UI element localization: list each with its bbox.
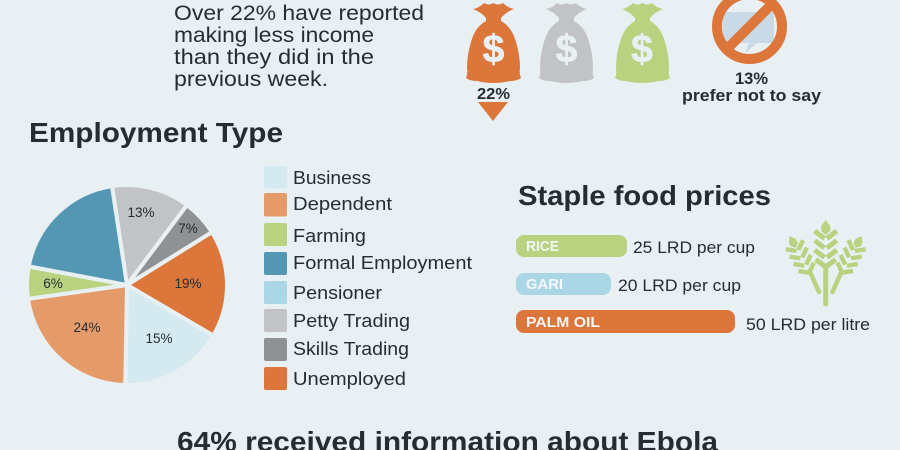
- bar: rice: RICE: [526, 239, 559, 255]
- bar: palm oil: 50 LRD per litre: [746, 315, 870, 334]
- icon: wheat: [781, 220, 870, 304]
- legend: employment type: Petty Trading: [293, 310, 410, 331]
- heading: staple food prices: Staple food prices: [518, 180, 771, 211]
- bar: palm oil: PALM OIL: [526, 315, 600, 331]
- bar: gari: GARI: [526, 277, 563, 293]
- pie chart: employment type: 7%: [178, 221, 198, 236]
- icon: down arrow: [478, 102, 508, 121]
- icon: no speech bubble: [717, 0, 782, 59]
- bar: palm oil: [516, 310, 870, 334]
- legend: employment type: Pensioner: [293, 282, 382, 303]
- intro text: [174, 2, 424, 91]
- legend: employment type: Skills Trading: [293, 338, 409, 359]
- pie chart: employment type: 15%: [145, 331, 173, 346]
- icon: green money bag: [615, 3, 670, 83]
- heading: employment type: Employment Type: [29, 117, 283, 148]
- icon: orange money bag: [466, 3, 521, 83]
- icon: orange money bag: $: [483, 28, 505, 71]
- legend: employment type: Dependent: [293, 193, 392, 214]
- pie chart: employment type: [27, 185, 227, 385]
- pie chart: employment type: 13%: [127, 205, 155, 220]
- stat: 22 percent less income: 22%: [477, 86, 510, 103]
- pie chart: employment type: 6%: [43, 276, 63, 291]
- legend: employment type: Unemployed: [293, 368, 406, 389]
- stat: prefer not to say: 13%: [735, 70, 768, 88]
- stat: prefer not to say: [682, 70, 822, 105]
- legend: employment type: Business: [293, 167, 371, 188]
- pie chart: employment type: 24%: [73, 320, 101, 335]
- legend: employment type: Farming: [293, 225, 366, 246]
- bar: rice: [516, 235, 755, 257]
- pie chart: employment type: 19%: [174, 276, 202, 291]
- stat: prefer not to say: prefer not to say: [682, 87, 822, 105]
- intro text: previous week.: [174, 68, 328, 91]
- intro text: making less income: [174, 24, 374, 47]
- legend: employment type: Formal Employment: [293, 252, 472, 273]
- intro text: Over 22% have reported: [174, 2, 424, 25]
- bar: rice: 25 LRD per cup: [633, 238, 755, 257]
- icon: green money bag: $: [631, 28, 653, 71]
- bar: gari: 20 LRD per cup: [618, 276, 741, 295]
- icon: grey money bag: [539, 3, 594, 83]
- intro text: than they did in the: [174, 46, 374, 69]
- legend: employment type: [264, 166, 472, 390]
- icon: grey money bag: $: [556, 28, 578, 71]
- bar: gari: [516, 273, 741, 295]
